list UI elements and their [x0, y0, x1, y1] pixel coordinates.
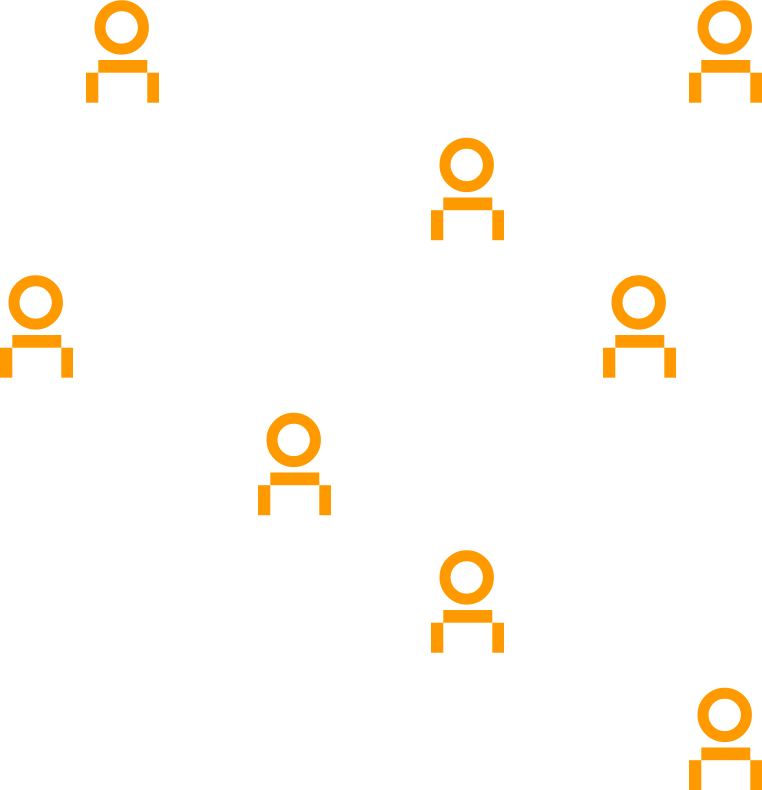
icon: person 8 [689, 693, 762, 790]
icon: person 1 [86, 6, 159, 103]
icon: person 6 [258, 418, 331, 515]
icon: person 7 [431, 556, 504, 653]
icon: person 4 [0, 281, 73, 378]
icon: person 3 [431, 143, 504, 240]
icon: person 2 [689, 6, 762, 103]
icon: person 5 [603, 281, 676, 378]
